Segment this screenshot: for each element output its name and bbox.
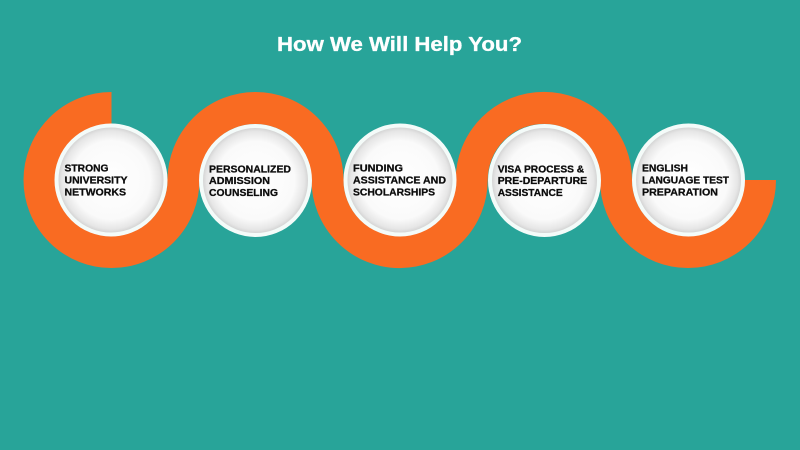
label 3: SCHOLARSHIPS — [353, 186, 435, 198]
step 5: english language test preparation — [634, 126, 743, 234]
label 4 — [498, 163, 587, 199]
label 5: ENGLISH — [642, 163, 688, 175]
step 2: personalized admission counseling — [201, 126, 310, 235]
circle 3 — [346, 126, 454, 234]
label 5: PREPARATION — [642, 186, 718, 198]
label 5 — [642, 163, 730, 198]
label 1: UNIVERSITY — [64, 175, 128, 187]
label 4: VISA PROCESS & — [498, 163, 585, 175]
circle 4 — [490, 126, 599, 235]
label 2: COUNSELING — [209, 187, 278, 199]
circle 1 — [56, 126, 166, 234]
label 1 — [64, 163, 128, 198]
label 2: ADMISSION — [209, 175, 270, 187]
label 1: NETWORKS — [64, 186, 126, 198]
step 1: strong university networks — [56, 126, 166, 234]
label 3 — [353, 163, 446, 198]
step 4: visa process and pre-departure assistance — [490, 126, 599, 235]
circle 5 — [634, 126, 743, 234]
label 4: ASSISTANCE — [498, 187, 563, 199]
label 2: PERSONALIZED — [209, 163, 291, 175]
label 3: FUNDING — [353, 163, 403, 175]
label 1: STRONG — [64, 163, 108, 175]
circle 2 — [201, 126, 310, 235]
title: How We Will Help You? — [277, 34, 522, 56]
step 3: funding assistance and scholarships — [346, 126, 454, 234]
label 2 — [209, 163, 291, 199]
label 4: PRE-DEPARTURE — [498, 175, 587, 187]
orange wave ribbon — [40, 108, 760, 252]
label 5: LANGUAGE TEST — [642, 175, 730, 187]
label 3: ASSISTANCE AND — [353, 175, 446, 187]
